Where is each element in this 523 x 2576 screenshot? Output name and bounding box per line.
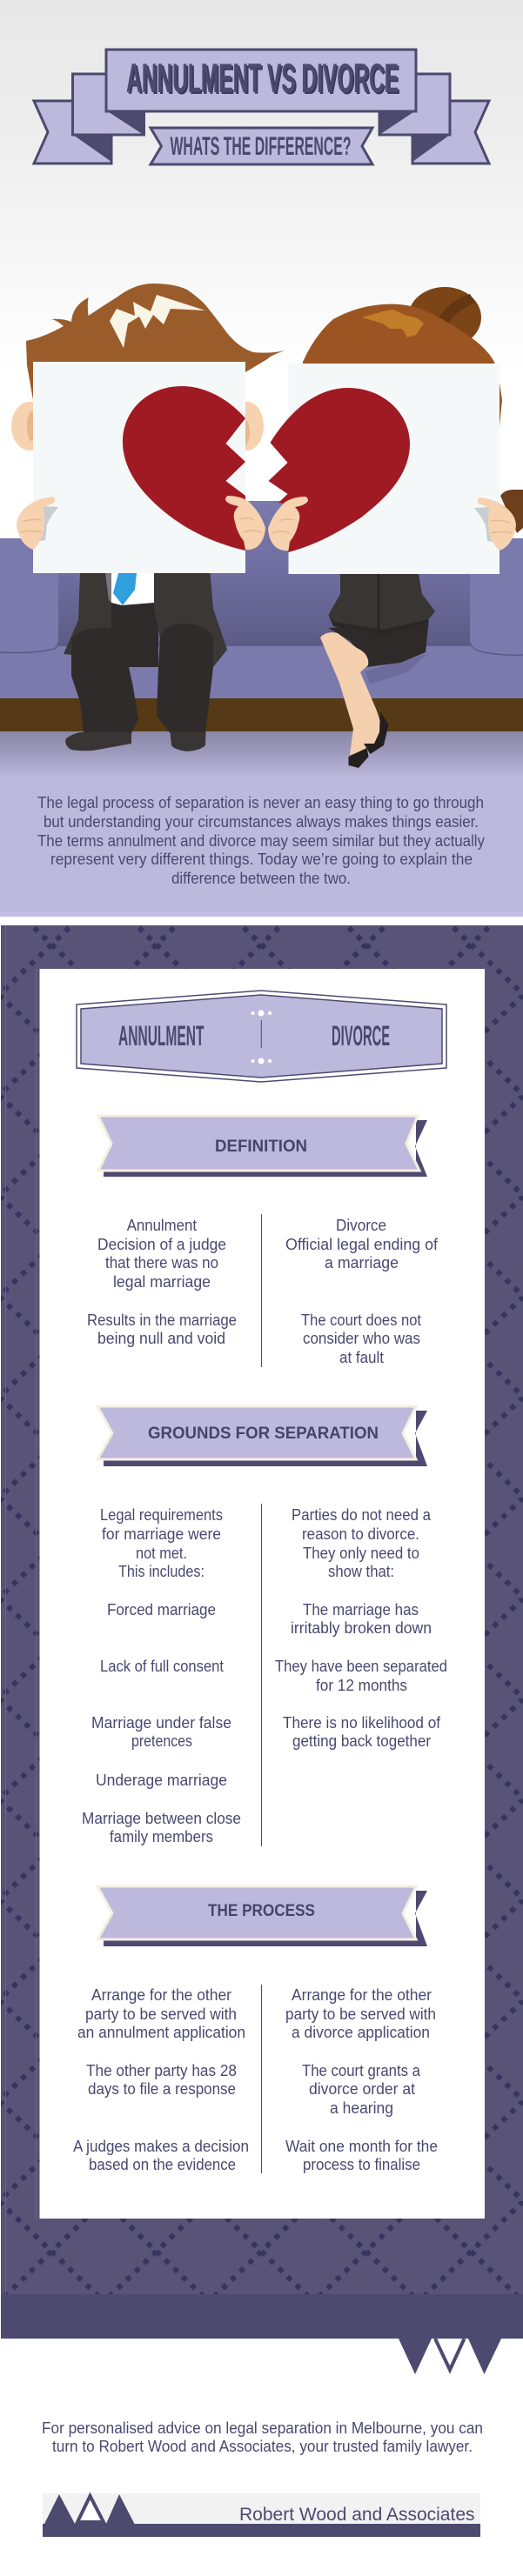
patterned comparison panel	[1, 925, 523, 2339]
logo triangles	[44, 2494, 134, 2524]
grounds: divorce column: They have been separated	[275, 1658, 447, 1675]
grounds: annulment column: This includes:	[118, 1563, 205, 1580]
grounds: annulment column: Marriage between close	[82, 1810, 241, 1827]
decorative triangles below panel	[399, 2339, 501, 2374]
subtitle: WHATS THE DIFFERENCE?	[171, 132, 352, 161]
man's ears	[11, 357, 264, 450]
man's body	[64, 573, 227, 751]
definition: divorce column: at fault	[339, 1349, 384, 1366]
definition: divorce column: Official legal ending of	[285, 1236, 439, 1253]
grounds: divorce column: The marriage has	[303, 1601, 419, 1618]
process: annulment column: days to file a response	[88, 2080, 236, 2098]
intro text	[37, 794, 485, 887]
banner left tail	[34, 101, 111, 164]
process: divorce column: Arrange for the other	[292, 1986, 432, 2004]
grounds: divorce column: Parties do not need a	[292, 1506, 432, 1524]
banner right fold	[379, 74, 450, 135]
definition: divorce column: The court does not	[301, 1311, 421, 1329]
definition: column divider	[261, 1214, 262, 1367]
grounds: annulment column: pretences	[131, 1732, 192, 1750]
broken heart left half	[123, 386, 245, 551]
woman's hair	[303, 287, 502, 426]
process: divorce column: process to finalise	[303, 2156, 420, 2173]
footer logo bar	[43, 2493, 480, 2537]
process: divorce column: a hearing	[330, 2099, 393, 2117]
grounds: divorce column	[275, 1506, 447, 1750]
intro text: difference between the two.	[171, 870, 351, 887]
section ribbon: grounds for separation	[97, 1406, 427, 1466]
main title	[126, 55, 400, 103]
banner right tail	[412, 101, 489, 164]
grounds: divorce column: show that:	[328, 1563, 394, 1580]
sofa	[0, 501, 523, 731]
grounds: divorce column: getting back together	[292, 1732, 431, 1750]
intro text: but understanding your circumstances always makes things easier.	[44, 813, 479, 831]
definition: divorce column: a marriage	[325, 1254, 399, 1271]
right paper half	[289, 364, 500, 574]
grounds: annulment column: Legal requirements	[100, 1506, 223, 1524]
subtitle ribbon	[151, 128, 372, 164]
banner left fold	[73, 74, 144, 135]
center right hand	[268, 497, 308, 551]
process: column divider	[261, 1985, 262, 2173]
definition: annulment column: Decision of a judge	[97, 1236, 226, 1253]
grounds: annulment column	[82, 1506, 241, 1845]
left hand	[17, 497, 58, 550]
illustration: couple on sofa holding broken heart	[0, 284, 523, 778]
page background gradient	[0, 0, 523, 374]
left paper half	[33, 362, 245, 573]
grounds: divorce column: They only need to	[303, 1545, 419, 1562]
company name: Robert Wood and Associates	[239, 2505, 475, 2525]
grounds: annulment column: for marriage were	[102, 1525, 221, 1543]
intro text: The legal process of separation is never an easy thing to go through	[37, 794, 484, 811]
grounds: divorce column: reason to divorce.	[302, 1525, 419, 1543]
definition: annulment column	[87, 1217, 237, 1347]
process: divorce column: Wait one month for the	[285, 2138, 438, 2155]
process: divorce column: a divorce application	[292, 2024, 430, 2041]
floor	[0, 731, 523, 778]
process: annulment column: A judges makes a decision	[73, 2138, 249, 2155]
grounds: divorce column: for 12 months	[316, 1677, 407, 1694]
title banner	[34, 50, 489, 164]
right hand	[474, 497, 516, 551]
definition: annulment column: legal marriage	[113, 1273, 211, 1291]
definition: annulment column: Annulment	[127, 1217, 197, 1234]
process: divorce column	[285, 1986, 438, 2173]
grounds: annulment column: Underage marriage	[96, 1772, 227, 1789]
grounds: divorce column: There is no likelihood of	[283, 1714, 441, 1732]
white content card	[40, 969, 485, 2219]
definition: divorce column	[285, 1217, 439, 1366]
grounds: annulment column: Marriage under false	[91, 1714, 231, 1732]
grounds: annulment column: family members	[110, 1828, 213, 1845]
grounds: divorce column: irritably broken down	[291, 1619, 432, 1637]
process: divorce column: divorce order at	[309, 2080, 415, 2098]
banner main panel	[106, 50, 416, 111]
badge divider and dots	[251, 1011, 272, 1064]
process: divorce column: The court grants a	[302, 2062, 421, 2079]
tie	[113, 573, 137, 605]
process: annulment column: based on the evidence	[89, 2156, 236, 2173]
comparison header badge	[77, 991, 446, 1082]
process: annulment column: an annulment application	[77, 2024, 245, 2041]
closing call to action: turn to Robert Wood and Associates, your trusted family lawyer.	[52, 2438, 473, 2455]
grounds: annulment column: Forced marriage	[107, 1601, 216, 1618]
broken heart right half	[268, 388, 410, 552]
center left hand	[225, 496, 265, 550]
process: annulment column: party to be served with	[85, 2005, 237, 2023]
intro text: The terms annulment and divorce may seem similar but they actually	[37, 832, 485, 850]
intro panel	[0, 777, 523, 917]
section ribbon: definition: DEFINITION	[215, 1137, 307, 1156]
section ribbon: grounds for separation: GROUNDS FOR SEPARATION	[148, 1424, 379, 1443]
intro text: represent very different things. Today we’re going to explain the	[50, 851, 473, 868]
process: annulment column	[73, 1986, 249, 2173]
closing call to action: For personalised advice on legal separation in Melbourne, you can	[42, 2419, 483, 2437]
grounds: annulment column: Lack of full consent	[100, 1658, 224, 1675]
definition: annulment column: Results in the marriage	[87, 1311, 237, 1329]
definition: divorce column: Divorce	[336, 1217, 386, 1234]
definition: divorce column: consider who was	[303, 1330, 420, 1347]
definition: annulment column: being null and void	[97, 1330, 225, 1347]
section ribbon: the process	[97, 1886, 427, 1946]
process: annulment column: The other party has 28	[86, 2062, 237, 2079]
process: annulment column: Arrange for the other	[91, 1986, 231, 2004]
comparison header badge: ANNULMENT	[118, 1020, 205, 1051]
section ribbon: the process: THE PROCESS	[208, 1901, 315, 1920]
comparison header badge: DIVORCE	[332, 1020, 390, 1051]
man's hair	[26, 284, 285, 400]
grounds: column divider	[261, 1504, 262, 1846]
definition: annulment column: that there was no	[105, 1254, 218, 1271]
closing call to action	[42, 2419, 483, 2455]
section ribbon: definition	[98, 1116, 427, 1177]
right sleeve	[500, 490, 523, 533]
process: divorce column: party to be served with	[285, 2005, 436, 2023]
woman's body	[320, 574, 435, 768]
grounds: annulment column: not met.	[136, 1545, 187, 1562]
